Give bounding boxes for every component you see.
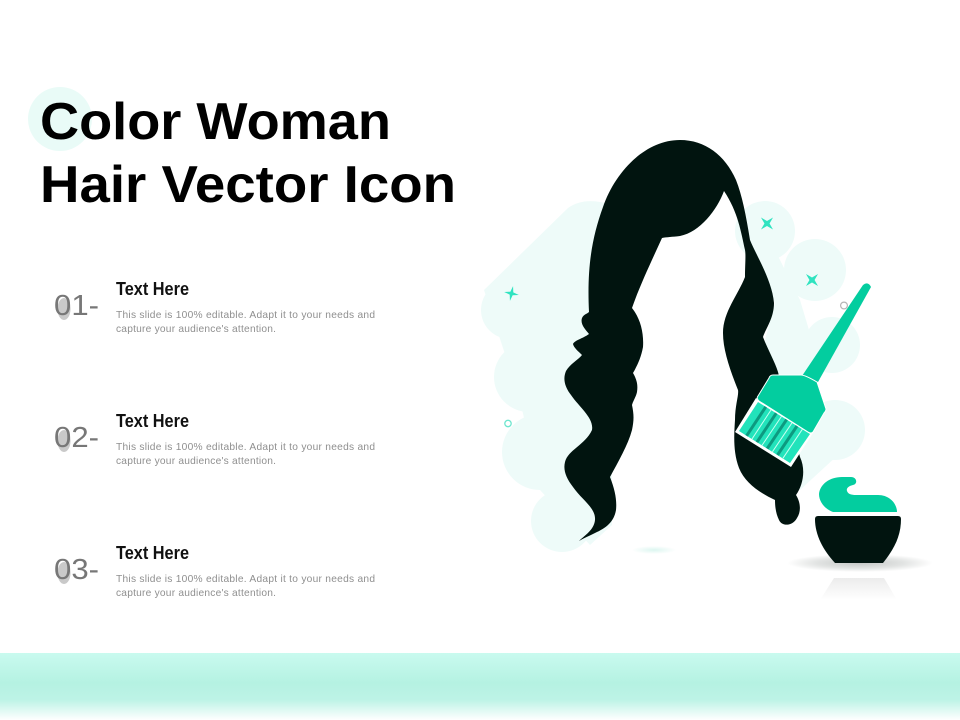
list item 1: This slide is 100% editable. Adapt it to your needs and (116, 310, 375, 321)
title: Color Woman (40, 93, 391, 151)
title: Hair Vector Icon (40, 156, 456, 214)
list item 3: 03- (54, 554, 99, 586)
list item 3: This slide is 100% editable. Adapt it to your needs and (116, 574, 375, 585)
list item 1: Text Here (116, 279, 189, 299)
list item 2: capture your audience's attention. (116, 456, 276, 467)
brush bristles (735, 398, 813, 467)
bottom band (0, 653, 960, 720)
list item 2: This slide is 100% editable. Adapt it to your needs and (116, 442, 375, 453)
bowl reflection (820, 578, 897, 600)
background blob (481, 201, 865, 552)
list item 1: 01- (54, 290, 99, 322)
list item 3 (54, 543, 375, 599)
hair silhouette (564, 140, 803, 541)
brush head (757, 375, 826, 433)
list item 3: Text Here (116, 543, 189, 563)
sparkles and rings (503, 211, 847, 427)
brush handle (802, 283, 871, 382)
list item 2 (54, 411, 375, 467)
list item 1 (54, 279, 375, 335)
title accent circle (28, 87, 92, 151)
list item 1: capture your audience's attention. (116, 324, 276, 335)
cream (819, 477, 897, 512)
bowl (815, 516, 901, 563)
title (40, 93, 456, 214)
list item 3: capture your audience's attention. (116, 588, 276, 599)
brush (735, 283, 871, 467)
list item 2: Text Here (116, 411, 189, 431)
floor glow (632, 546, 676, 554)
list item 2: 02- (54, 422, 99, 454)
bowl shadow (787, 554, 933, 572)
